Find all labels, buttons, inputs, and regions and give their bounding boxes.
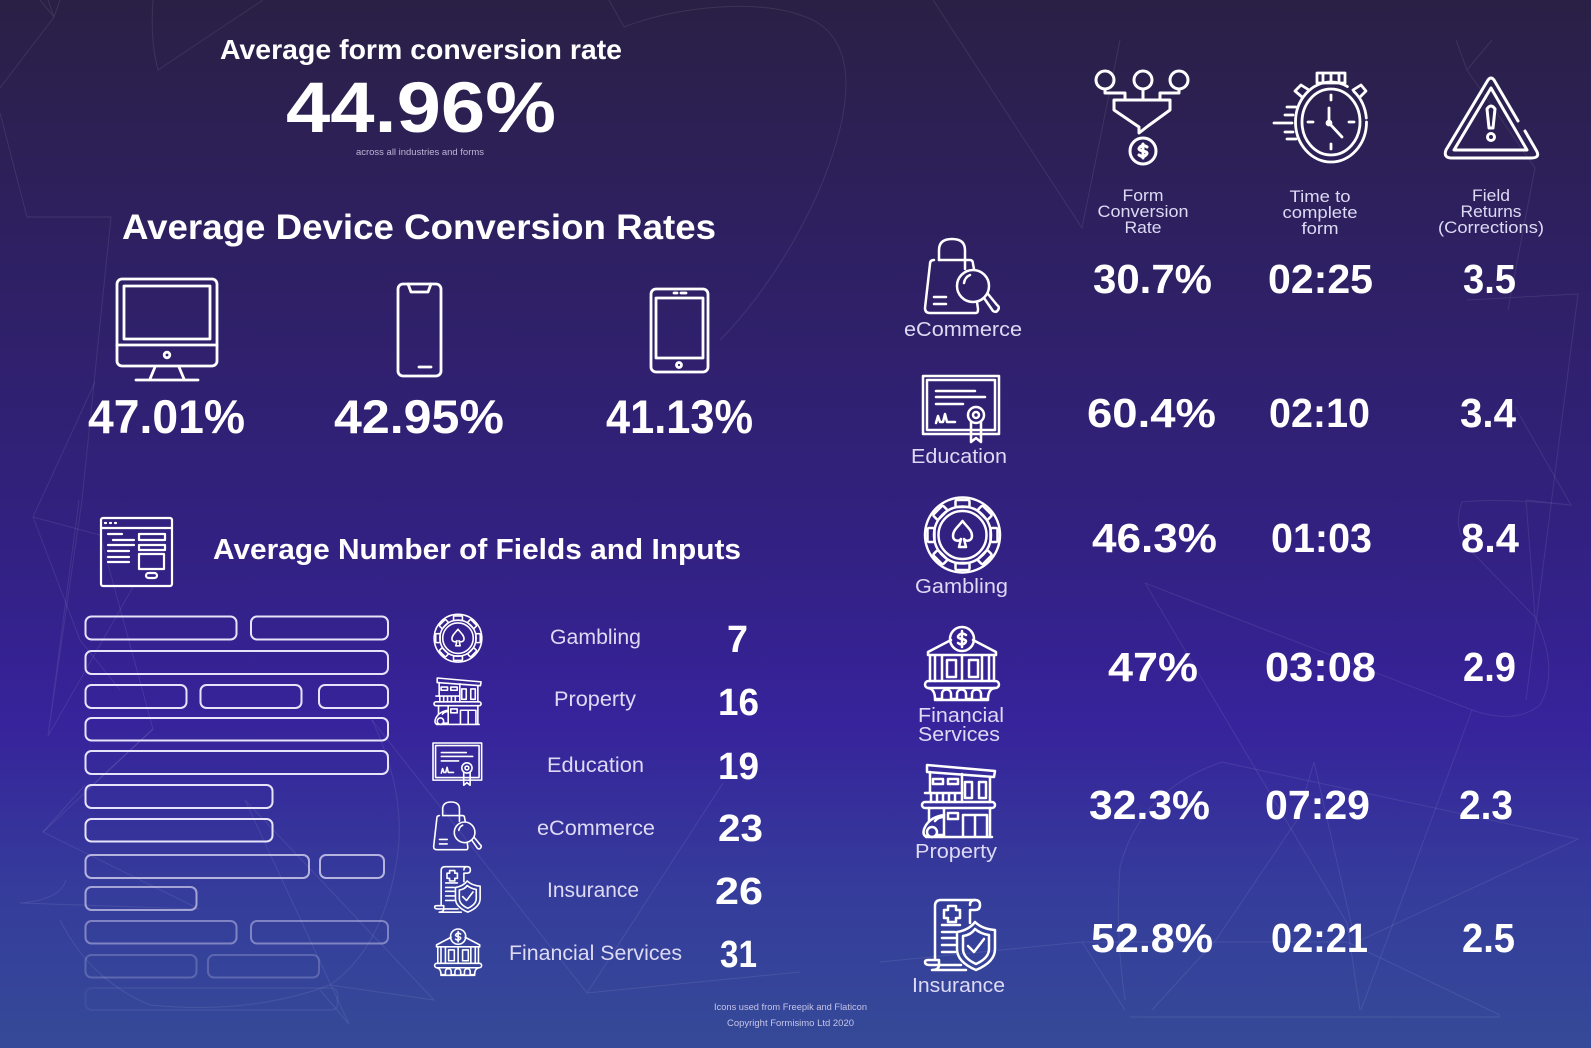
label: form bbox=[1302, 219, 1338, 238]
row: gambling bbox=[915, 498, 1519, 598]
values: 2.3 bbox=[1459, 782, 1513, 828]
values: 47% bbox=[1108, 644, 1198, 690]
values: 30.7% bbox=[1093, 256, 1212, 302]
row: property bbox=[915, 765, 1513, 863]
values bbox=[1087, 390, 1516, 436]
icon: warning triangle bbox=[1445, 78, 1538, 158]
footer credits bbox=[714, 1002, 867, 1029]
label: Insurance bbox=[547, 879, 639, 902]
icon: casino chip bbox=[925, 498, 1000, 572]
footer credits: Copyright Formisimo Ltd 2020 bbox=[727, 1018, 854, 1029]
panel: average number of fields and inputs bbox=[86, 518, 763, 1010]
row: property fields bbox=[434, 678, 759, 724]
value: 16 bbox=[718, 682, 759, 724]
icon: bank bbox=[925, 627, 999, 700]
row: education bbox=[911, 376, 1516, 468]
label: Returns bbox=[1460, 202, 1522, 221]
label: complete bbox=[1282, 203, 1358, 222]
values: 02:10 bbox=[1269, 390, 1370, 436]
row: ecommerce bbox=[904, 239, 1516, 341]
row: education fields bbox=[433, 743, 759, 788]
heading: fields and inputs: Average Number of Fields and Inputs bbox=[213, 534, 741, 566]
row: gambling fields bbox=[434, 614, 748, 662]
values: 46.3% bbox=[1092, 515, 1217, 561]
label: Conversion bbox=[1098, 202, 1188, 221]
icon: funnel bbox=[1096, 71, 1188, 164]
label: Rate bbox=[1124, 218, 1162, 237]
row: ecommerce fields bbox=[434, 802, 763, 850]
subcaption: across all industries and forms bbox=[356, 147, 485, 157]
icon: bank bbox=[435, 929, 482, 975]
icon: building bbox=[434, 678, 481, 724]
label: Education bbox=[547, 754, 644, 777]
icon: stopwatch bbox=[1274, 73, 1366, 162]
value: 7 bbox=[727, 619, 748, 661]
panel: industry metrics table bbox=[904, 71, 1544, 997]
values bbox=[1093, 256, 1516, 302]
stat: desktop rate: 47.01% bbox=[88, 390, 245, 443]
icon: insurance policy bbox=[925, 900, 995, 970]
label: eCommerce bbox=[904, 319, 1022, 341]
icon: insurance policy bbox=[435, 867, 480, 912]
icon: web form window bbox=[101, 518, 172, 586]
row: insurance bbox=[912, 900, 1515, 997]
label: eCommerce bbox=[537, 817, 655, 840]
label bbox=[1438, 186, 1544, 237]
column header: time to complete form bbox=[1274, 73, 1366, 238]
icon: building bbox=[922, 765, 995, 837]
label: Financial bbox=[918, 705, 1004, 727]
values: 3.4 bbox=[1460, 390, 1516, 436]
stat: tablet rate: 41.13% bbox=[606, 390, 753, 443]
label: Gambling bbox=[915, 576, 1008, 598]
column header: form conversion rate bbox=[1096, 71, 1188, 237]
icon: certificate bbox=[433, 743, 482, 785]
row: financial services bbox=[918, 627, 1516, 746]
icon: certificate bbox=[923, 376, 999, 442]
values bbox=[1089, 782, 1513, 828]
values bbox=[1091, 915, 1515, 961]
values: 32.3% bbox=[1089, 782, 1210, 828]
label: Education bbox=[911, 446, 1007, 468]
values: 52.8% bbox=[1091, 915, 1213, 961]
row: insurance fields bbox=[435, 867, 763, 913]
label: Financial Services bbox=[509, 942, 682, 965]
label bbox=[1098, 186, 1188, 237]
values: 2.5 bbox=[1462, 915, 1515, 961]
label: Property bbox=[554, 688, 637, 711]
values: 02:25 bbox=[1268, 256, 1373, 302]
label: Insurance bbox=[912, 975, 1005, 997]
values: 8.4 bbox=[1461, 515, 1519, 561]
stat: mobile rate: 42.95% bbox=[334, 390, 504, 443]
row: financial services fields bbox=[435, 929, 757, 976]
form field illustration bbox=[86, 616, 388, 1010]
label: (Corrections) bbox=[1438, 218, 1544, 237]
label: Field bbox=[1472, 186, 1510, 205]
heading: average form conversion rate: Average form conversion rate bbox=[220, 34, 622, 65]
value: 23 bbox=[718, 808, 763, 850]
column header: field returns bbox=[1438, 78, 1544, 237]
label bbox=[1282, 187, 1358, 238]
icon: casino chip bbox=[434, 614, 482, 662]
label bbox=[918, 705, 1004, 746]
label: Property bbox=[915, 841, 997, 863]
value: 31 bbox=[720, 934, 757, 976]
values: 02:21 bbox=[1271, 915, 1368, 961]
values bbox=[1108, 644, 1516, 690]
label: Form bbox=[1122, 186, 1164, 205]
label: Time to bbox=[1290, 187, 1350, 206]
panel: average form conversion rate bbox=[220, 34, 622, 157]
label: Services bbox=[918, 724, 1000, 746]
footer credits: Icons used from Freepik and Flaticon bbox=[714, 1002, 867, 1013]
values: 60.4% bbox=[1087, 390, 1216, 436]
icon: shopping bag bbox=[925, 239, 999, 313]
icon: tablet bbox=[651, 289, 708, 372]
heading: device conversion rates: Average Device Conversion Rates bbox=[122, 208, 716, 247]
icon: desktop monitor bbox=[117, 279, 217, 380]
values: 07:29 bbox=[1265, 782, 1370, 828]
panel: device conversion rates bbox=[88, 208, 753, 443]
value: 19 bbox=[718, 746, 759, 788]
values: 03:08 bbox=[1265, 644, 1376, 690]
values: 2.9 bbox=[1463, 644, 1516, 690]
values: 01:03 bbox=[1271, 515, 1372, 561]
big stat: 44.96%: 44.96% bbox=[286, 69, 556, 148]
icon: shopping bag bbox=[434, 802, 481, 850]
value: 26 bbox=[715, 871, 763, 913]
label: Gambling bbox=[550, 626, 641, 649]
icon: smartphone bbox=[398, 284, 441, 376]
values bbox=[1092, 515, 1519, 561]
values: 3.5 bbox=[1463, 256, 1516, 302]
